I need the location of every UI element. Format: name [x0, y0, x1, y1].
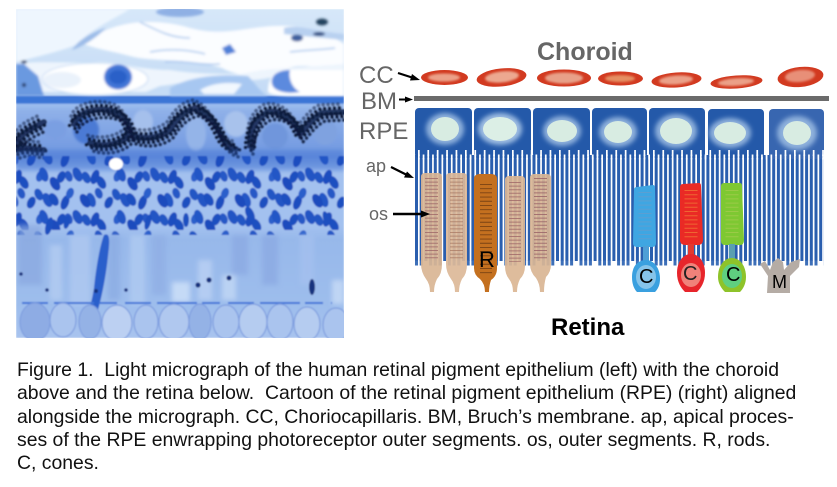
dark elongated cell — [90, 234, 110, 310]
cell 7 — [777, 65, 824, 89]
arrow: BM — [399, 96, 413, 102]
apical processes of RPE — [415, 208, 824, 263]
RPE cell 4 — [592, 108, 647, 158]
green cone — [718, 183, 746, 292]
photoreceptor streaks — [18, 225, 344, 305]
cones — [632, 183, 800, 293]
heading: Retina: Retina — [551, 314, 625, 341]
capillary cells (CC) — [421, 65, 824, 90]
red cone: C — [683, 263, 697, 285]
Muller cell — [760, 258, 800, 293]
RPE cell 7 — [769, 109, 824, 159]
rod 1 — [421, 173, 442, 292]
figure caption: Figure 1. Light micrograph of the human retinal pigment epithelium (left) with the choroid — [17, 359, 779, 381]
RPE cell 5 — [649, 108, 705, 158]
label: CC: CC — [359, 62, 394, 89]
rod 3 (highlighted) — [474, 174, 497, 292]
rod 4 — [505, 176, 525, 292]
RPE cells — [415, 108, 824, 159]
micrograph of retinal pigment epithelium — [12, 7, 349, 342]
label: os: os — [369, 204, 388, 224]
dark specks — [19, 272, 315, 295]
label: R: R — [479, 247, 495, 272]
blue cone — [632, 185, 660, 292]
rod 2 — [446, 173, 467, 292]
cell 1 — [421, 70, 468, 85]
cell 2 — [476, 66, 527, 89]
arrow: CC — [398, 73, 420, 80]
rods — [421, 173, 551, 292]
photoreceptor cell bodies — [20, 303, 349, 342]
Bruch's membrane bar — [414, 96, 829, 101]
red cone — [677, 183, 705, 292]
rod 5 — [530, 174, 551, 292]
photoreceptor inner segment nuclei — [16, 150, 344, 236]
blue cone: C — [639, 266, 653, 288]
white slits at the cell bases — [418, 153, 824, 157]
arrow: ap — [391, 167, 414, 178]
RPE cell 6 — [708, 109, 764, 158]
RPE cell 2 — [474, 108, 531, 158]
cell 3 — [537, 70, 591, 86]
RPE cell 1 — [415, 108, 472, 158]
RPE cell 3 — [533, 108, 590, 158]
heading: Choroid: Choroid — [537, 38, 633, 66]
choroid tissue — [16, 7, 344, 96]
figure caption: ses of the RPE enwrapping photoreceptor outer segments. os, outer segments. R, rods. — [17, 429, 770, 451]
label: RPE: RPE — [359, 118, 408, 145]
cell 6 — [710, 74, 763, 90]
label: ap: ap — [366, 156, 386, 176]
cell 4 — [598, 72, 643, 86]
green cone: C — [726, 264, 740, 286]
RPE cells with melanin pigment — [12, 100, 348, 158]
figure caption: alongside the micrograph. CC, Choriocapillaris. BM, Bruch’s membrane. ap, apical proces- — [17, 406, 794, 428]
figure caption: above and the retina below. Cartoon of the retinal pigment epithelium (RPE) (right) aligned — [17, 382, 796, 404]
cell 5 — [651, 71, 702, 89]
arrow: os — [393, 210, 430, 218]
Muller cell: M — [772, 272, 787, 292]
label: BM: BM — [361, 88, 397, 115]
figure caption: C, cones. — [17, 452, 99, 474]
